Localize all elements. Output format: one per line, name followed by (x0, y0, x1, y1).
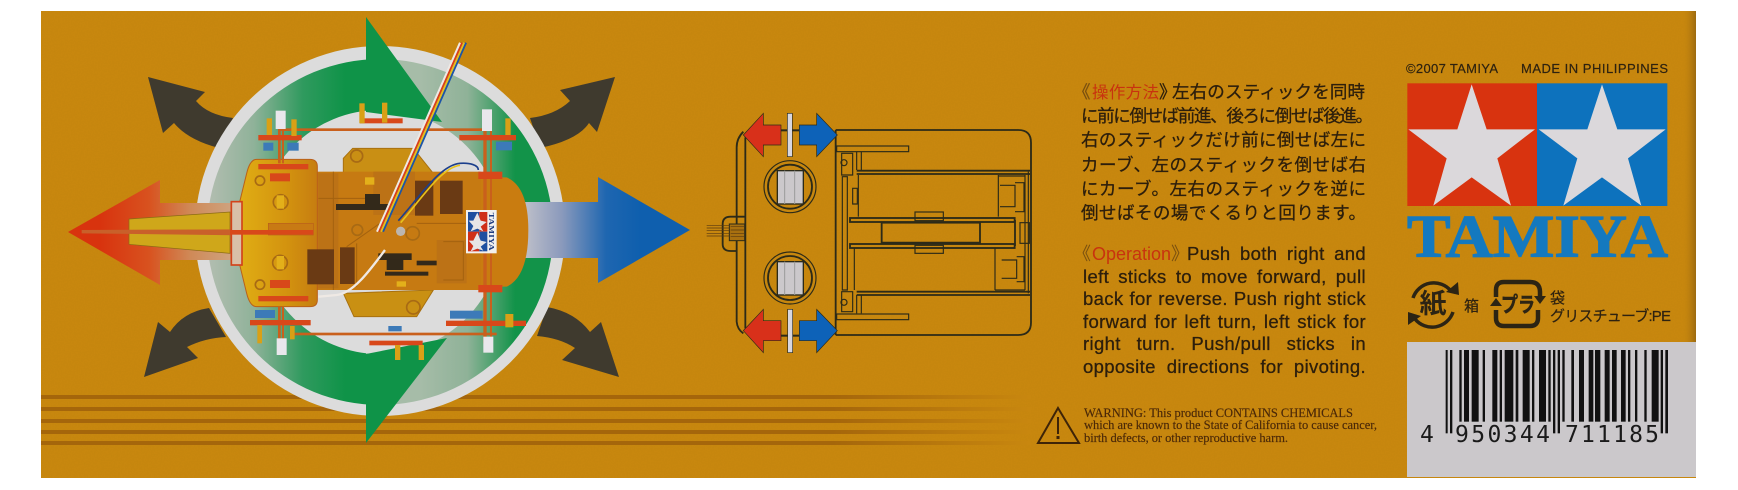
Japanese operation text: カーブ、左のスティックを倒せば右 (1081, 155, 1366, 175)
top stick (764, 161, 816, 213)
white disc (195, 46, 565, 416)
gearbox body outline (836, 130, 1031, 335)
motors (307, 181, 463, 284)
right dome (477, 177, 528, 287)
control stick diagram (707, 113, 1031, 353)
English operation text: back for reverse. Push right stick (1083, 288, 1366, 309)
mini Tamiya label (466, 210, 497, 253)
rear stick holder (129, 212, 230, 253)
origin: MADE IN PHILIPPINES (1521, 61, 1668, 76)
arrow: dark curved bottom-right (537, 307, 619, 377)
recycle icon: plastic: プラ (1501, 294, 1535, 317)
English operation text: left sticks to move forward, pull (1083, 266, 1366, 286)
Japanese operation text: に前に倒せば前進、後ろに倒せば後進。 (1081, 106, 1373, 126)
barcode digits (1420, 422, 1659, 448)
white lead wire (318, 250, 385, 297)
label: grease tube PE: グリスチューブ:PE (1550, 307, 1671, 325)
battery compartment (841, 152, 1030, 313)
barcode digits: 711185 (1565, 422, 1659, 448)
frame rods (278, 127, 497, 343)
copyright: ©2007 TAMIYA (1406, 61, 1498, 76)
left star (1408, 84, 1535, 206)
warning text: which are known to the State of California to cause cancer, (1084, 418, 1377, 432)
Japanese operation text: 左右のスティックを同時 (1172, 82, 1365, 102)
arrow: dark curved top-left (148, 77, 233, 148)
English operation heading: 》 (1171, 244, 1189, 264)
right box edge (1682, 11, 1696, 342)
gears (336, 194, 437, 276)
top stick arrows (743, 113, 837, 157)
barcode digits: 4 (1420, 422, 1434, 448)
Japanese operation text (1073, 82, 1373, 223)
lead wires blue and yellow (398, 163, 478, 223)
English operation text: Push both right and (1187, 243, 1366, 264)
recycle icon: paper (1408, 282, 1459, 327)
Tamiya wordmark: TAMIYA (1407, 204, 1668, 270)
red and yellow frame clips (250, 118, 526, 345)
barcode panel (1407, 342, 1696, 477)
front housing outline (737, 132, 743, 333)
English operation text: forward for left turn, left stick for (1083, 310, 1366, 332)
chassis outlines (318, 172, 480, 290)
rear stick (82, 229, 243, 235)
English operation heading: Operation (1092, 244, 1171, 264)
Japanese operation text: 》 (1159, 82, 1176, 102)
English operation heading (1073, 244, 1189, 264)
red square (1407, 83, 1537, 206)
chassis shading (318, 172, 467, 288)
bottom hump (343, 290, 433, 317)
recycle icon: paper: 紙 (1420, 289, 1446, 319)
robot (82, 43, 528, 360)
wire connector (396, 227, 405, 236)
screws and bosses (255, 150, 420, 314)
arrow: dark curved bottom-left (144, 308, 226, 377)
cable connector (707, 217, 745, 251)
label: box: 箱 (1464, 298, 1479, 315)
Japanese operation text: 倒せばその場でくるりと回ります。 (1081, 203, 1366, 223)
English operation text (1083, 243, 1366, 378)
cover centre band (268, 223, 313, 235)
recycle icon: plastic (1490, 282, 1546, 326)
barcode digits: 950344 (1455, 422, 1550, 448)
centre red rod (230, 230, 313, 235)
side slots (837, 146, 909, 152)
rear plate (231, 202, 242, 265)
Japanese operation text: 操作方法 (1092, 83, 1159, 102)
Japanese operation text: 《 (1073, 82, 1090, 102)
speed stripes (41, 395, 1031, 445)
Tamiya star logo (1407, 83, 1667, 206)
English operation text: right turn. Push/pull sticks in (1083, 333, 1366, 354)
warning text (1084, 406, 1377, 445)
barcode bars (1446, 350, 1668, 433)
warning icon (1038, 408, 1079, 443)
arrow: red backward (68, 180, 240, 285)
English operation text: opposite directions for pivoting. (1083, 356, 1366, 376)
front cover (239, 159, 317, 307)
yellow parts (277, 177, 406, 287)
bottom green arrowhead (366, 338, 447, 443)
arrow: dark curved top-right (530, 77, 615, 148)
blue square (1537, 83, 1667, 206)
bottom stick (764, 252, 816, 304)
centre chassis (317, 172, 481, 290)
white posts (276, 109, 493, 355)
blue blocks (255, 142, 512, 331)
ring left half (209, 60, 366, 404)
arrow: blue forward (525, 177, 690, 283)
label: bag: 袋 (1550, 290, 1565, 307)
mini Tamiya label: TAMIYA (487, 213, 496, 252)
Japanese operation text: にカーブ。左右のスティックを逆に (1081, 179, 1366, 199)
ribbon cable (377, 43, 466, 232)
top green arrowhead (366, 17, 442, 122)
English operation heading: 《 (1073, 244, 1091, 264)
warning text: birth defects, or other reproductive harm. (1084, 431, 1288, 445)
ring right half (366, 60, 551, 404)
warning text: WARNING: This product CONTAINS CHEMICALS (1084, 406, 1353, 420)
rotation ring (195, 17, 565, 443)
bottom stick arrows (743, 309, 837, 353)
right star (1539, 84, 1666, 206)
Japanese operation text: 右のスティックだけ前に倒せば左に (1081, 130, 1366, 150)
top hump (343, 148, 433, 173)
